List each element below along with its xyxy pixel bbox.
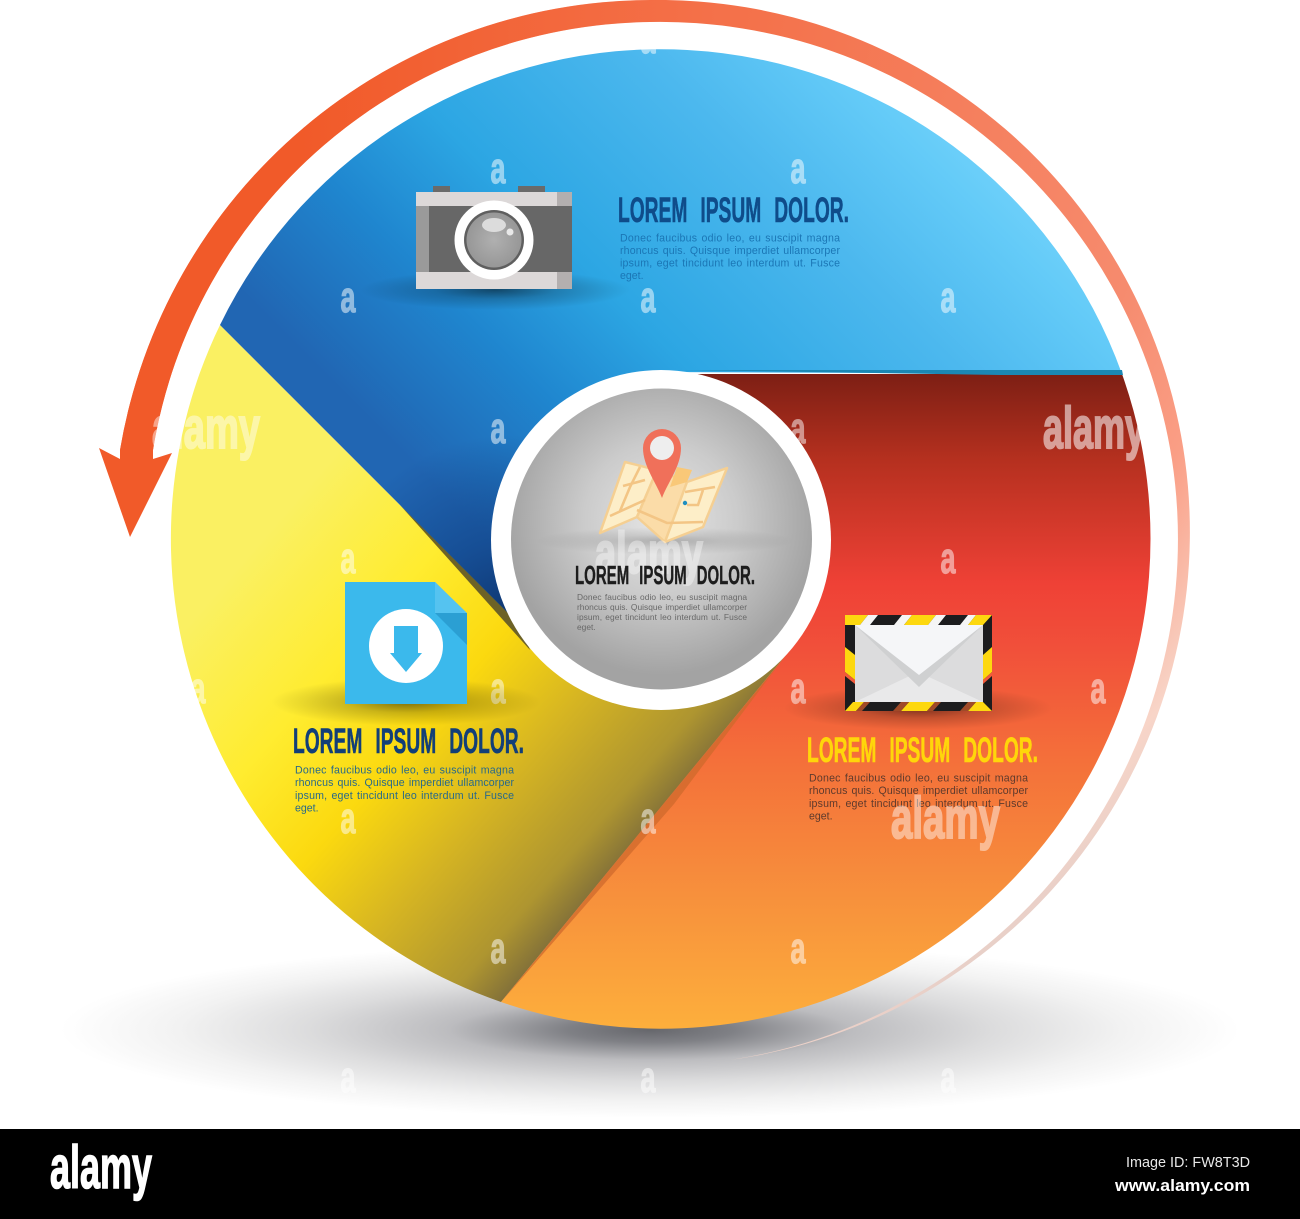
body text: blue segment: Donec faucibus odio leo, eu suscipit magna: [620, 232, 840, 244]
body text: center: [577, 592, 747, 632]
segment: yellow: [171, 325, 786, 1002]
small watermark tiles: a: [340, 534, 356, 583]
body text: blue segment: eget.: [620, 270, 644, 282]
icon: document download: [271, 582, 541, 726]
small watermark tiles: a: [490, 144, 506, 193]
text block: blue segment: [618, 191, 849, 282]
small watermark tiles: a: [1090, 664, 1106, 713]
small watermark tiles: a: [640, 1053, 656, 1102]
orange segment edge fold: [501, 655, 786, 1002]
watermark: center: alamy: [595, 521, 703, 586]
footer website: www.alamy.com: [1114, 1176, 1250, 1195]
small watermark tiles: a: [790, 924, 806, 973]
heading: red segment: LOREM IPSUM DOLOR.: [807, 731, 1038, 770]
heading: blue segment: LOREM IPSUM DOLOR.: [618, 191, 849, 230]
body text: yellow segment: eget.: [295, 802, 319, 814]
small watermark tiles: a: [940, 534, 956, 583]
small watermark tiles: [190, 14, 1106, 1102]
large watermark: yellow and red: alamy: [152, 396, 260, 461]
ground shadow: [60, 942, 1240, 1118]
heading: center: LOREM IPSUM DOLOR.: [575, 560, 755, 590]
footer bar: [0, 1129, 1300, 1219]
segment: blue: [220, 49, 1122, 630]
icon: map with pin: [600, 429, 727, 542]
large watermark: yellow and red: alamy: [1043, 396, 1145, 461]
body text: yellow segment: ipsum, eget tincidunt leo interdum ut. Fusce: [295, 790, 514, 802]
small watermark tiles: a: [340, 273, 356, 322]
small watermark tiles: a: [940, 1053, 956, 1102]
center circle: [491, 370, 831, 710]
body text: center: eget.: [577, 622, 596, 632]
footer logo: alamy: [50, 1134, 152, 1201]
body text: blue segment: ipsum, eget tincidunt leo interdum ut. Fusce: [620, 258, 840, 270]
small watermark tiles: a: [340, 794, 356, 843]
small watermark tiles: a: [640, 14, 656, 63]
body text: red segment: Donec faucibus odio leo, eu suscipit magna: [809, 772, 1028, 784]
body text: red segment: [809, 772, 1028, 822]
body text: yellow segment: Donec faucibus odio leo, eu suscipit magna: [295, 764, 514, 776]
footer image id: Image ID: FW8T3D: [1126, 1154, 1250, 1171]
small watermark tiles: a: [490, 924, 506, 973]
pie chart: [171, 49, 1151, 1029]
small watermark tiles: a: [790, 144, 806, 193]
body text: red segment: rhoncus quis. Quisque imperdiet ullamcorper: [809, 785, 1028, 797]
text block: yellow segment: [293, 722, 524, 814]
small watermark tiles: a: [490, 664, 506, 713]
small watermark tiles: a: [190, 664, 206, 713]
body text: center: ipsum, eget tincidunt leo interdum ut. Fusce: [577, 612, 747, 622]
small watermark tiles: a: [640, 273, 656, 322]
small watermark tiles: a: [640, 794, 656, 843]
large watermark: yellow and red: [152, 396, 1145, 461]
icon: envelope: [783, 615, 1053, 730]
yellow segment edge shadow: [400, 505, 530, 650]
text block: red segment: [807, 731, 1038, 851]
small watermark tiles: a: [790, 404, 806, 453]
circular arrow: [99, 0, 1190, 1060]
small watermark tiles: a: [940, 273, 956, 322]
small watermark tiles: a: [340, 1053, 356, 1102]
blue segment dark tip: [220, 49, 1122, 630]
body text: yellow segment: [295, 764, 514, 814]
body text: red segment: eget.: [809, 810, 833, 822]
icon: map pin: [643, 429, 681, 498]
body text: center: rhoncus quis. Quisque imperdiet ullamcorper: [577, 602, 747, 612]
blue segment edge sliver: [680, 370, 1123, 375]
body text: blue segment: [620, 232, 840, 282]
center shadow band: [535, 527, 795, 555]
segment: red orange: [501, 374, 1151, 1029]
watermark: red segment: alamy: [891, 786, 1000, 851]
arrow head: [99, 448, 172, 537]
small watermark tiles: a: [790, 664, 806, 713]
heading: yellow segment: LOREM IPSUM DOLOR.: [293, 722, 524, 761]
small watermark tiles: a: [490, 404, 506, 453]
body text: yellow segment: rhoncus quis. Quisque imperdiet ullamcorper: [295, 777, 514, 789]
body text: center: Donec faucibus odio leo, eu suscipit magna: [577, 592, 747, 602]
body text: red segment: ipsum, eget tincidunt leo interdum ut. Fusce: [809, 798, 1028, 810]
body text: blue segment: rhoncus quis. Quisque imperdiet ullamcorper: [620, 245, 840, 257]
icon: camera: [360, 186, 630, 310]
